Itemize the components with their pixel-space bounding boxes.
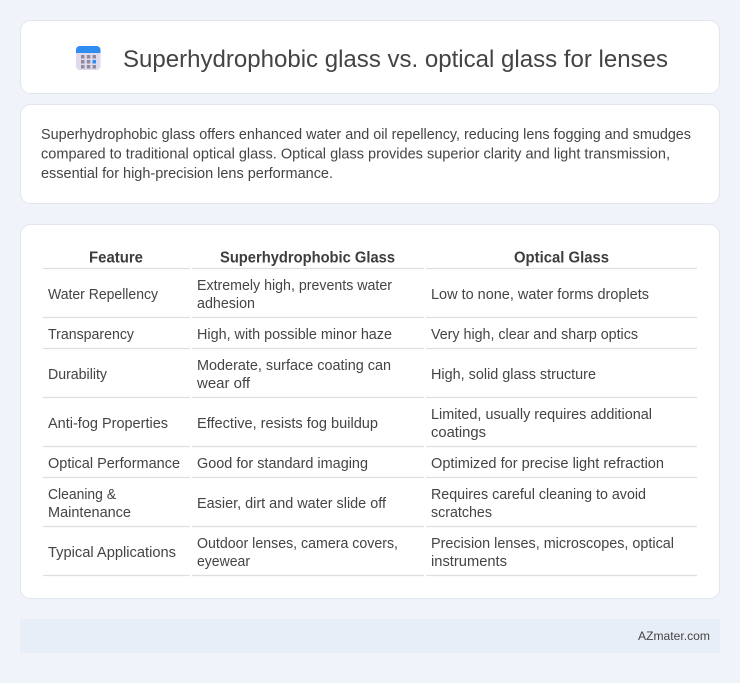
row: optical performance: Optical Performance [48, 456, 180, 472]
summary text: Superhydrophobic glass offers enhanced water and oil repellency, reducing lens fogging and smudges [41, 127, 691, 143]
table header [89, 250, 609, 266]
row: typical applications: Typical Applications [48, 545, 176, 561]
row: cleaning and maintenance: Cleaning & [48, 487, 116, 503]
panel: summary [20, 104, 720, 204]
row: durability: High, solid glass structure [431, 367, 596, 383]
row: cleaning and maintenance: Requires careful cleaning to avoid [431, 487, 646, 503]
footer credit: AZmater.com [638, 629, 710, 643]
row: transparency [48, 327, 638, 343]
row: cleaning and maintenance [48, 487, 646, 521]
summary text: essential for high-precision lens performance. [41, 166, 333, 182]
row: optical performance [48, 456, 664, 472]
row: durability: wear off [196, 376, 251, 392]
row: durability: Moderate, surface coating can [197, 358, 391, 374]
panel: comparison table [20, 224, 720, 598]
row: water repellency: adhesion [197, 296, 255, 312]
table header: Superhydrophobic Glass [220, 250, 395, 266]
row rules [43, 268, 697, 576]
row: anti-fog properties: Limited, usually requires additional [431, 407, 652, 423]
row: durability: Durability [48, 367, 108, 383]
table header: Optical Glass [514, 250, 609, 266]
row: optical performance: Optimized for precise light refraction [431, 456, 664, 472]
row: cleaning and maintenance: Maintenance [48, 505, 131, 521]
row: water repellency: Low to none, water forms droplets [431, 287, 649, 303]
table header: Feature [89, 250, 143, 266]
row: typical applications [48, 536, 674, 570]
row: anti-fog properties [48, 407, 652, 441]
row: typical applications: instruments [431, 554, 507, 570]
row: durability [48, 358, 596, 392]
row: typical applications: Precision lenses, microscopes, optical [431, 536, 674, 552]
row: anti-fog properties: Effective, resists fog buildup [197, 416, 378, 432]
row: transparency: Transparency [48, 327, 135, 343]
title: Superhydrophobic glass vs. optical glass for lenses [123, 46, 668, 73]
header panel [20, 20, 720, 94]
row: cleaning and maintenance: scratches [431, 505, 492, 521]
row: transparency: High, with possible minor haze [197, 327, 392, 343]
row: water repellency: Water Repellency [48, 287, 159, 303]
summary text: compared to traditional optical glass. Optical glass provides superior clarity and light transmission, [41, 146, 670, 162]
summary text [41, 127, 691, 182]
footer bar [20, 619, 720, 653]
row: typical applications: eyewear [197, 554, 250, 570]
row: anti-fog properties: Anti-fog Properties [48, 416, 168, 432]
row: optical performance: Good for standard imaging [197, 456, 368, 472]
row: cleaning and maintenance: Easier, dirt and water slide off [197, 496, 387, 512]
row: transparency: Very high, clear and sharp optics [431, 327, 638, 343]
icon: calendar [76, 46, 100, 70]
row: anti-fog properties: coatings [431, 425, 486, 441]
row: typical applications: Outdoor lenses, camera covers, [197, 536, 398, 552]
row: water repellency [48, 278, 649, 312]
row: water repellency: Extremely high, prevents water [197, 278, 392, 294]
